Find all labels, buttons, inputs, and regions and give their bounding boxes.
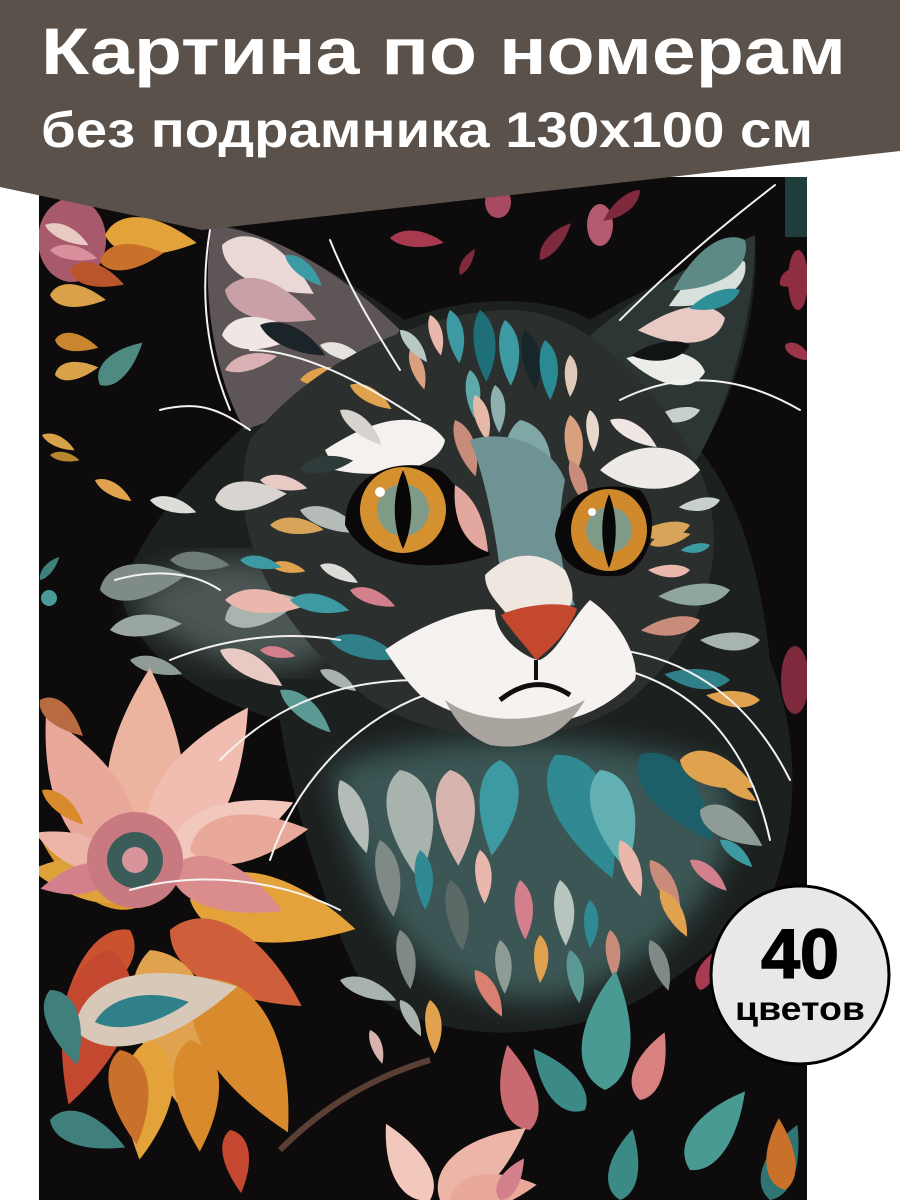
left ear <box>208 224 400 430</box>
badge: 40 colours: 40 <box>761 915 839 993</box>
chest fur feathers <box>331 739 770 1065</box>
top right buds and leaves <box>389 177 818 714</box>
right eye <box>555 486 692 576</box>
badge: 40 colours <box>711 886 889 1064</box>
head and forehead <box>214 308 714 738</box>
subtitle: без подрамника 130х100 см <box>41 102 813 158</box>
painting: cat and flowers <box>13 177 818 1200</box>
small left flower accents <box>40 557 84 825</box>
large flower lower left <box>13 668 362 1195</box>
left eye <box>345 465 490 565</box>
cat fur mass <box>120 225 792 1033</box>
header banner <box>0 0 900 230</box>
top left flowers <box>38 198 198 464</box>
left cheek fur <box>92 474 403 739</box>
right cheek fur <box>636 495 761 709</box>
white brow patches <box>325 420 445 474</box>
badge: 40 colours: цветов <box>735 990 865 1027</box>
white muzzle and nose <box>385 556 636 747</box>
right ear <box>590 235 755 462</box>
bottom leaves and buds <box>280 949 811 1200</box>
white whiskers and hair strokes <box>115 185 800 910</box>
nose bridge <box>470 436 575 615</box>
title: Картина по номерам <box>41 14 846 88</box>
